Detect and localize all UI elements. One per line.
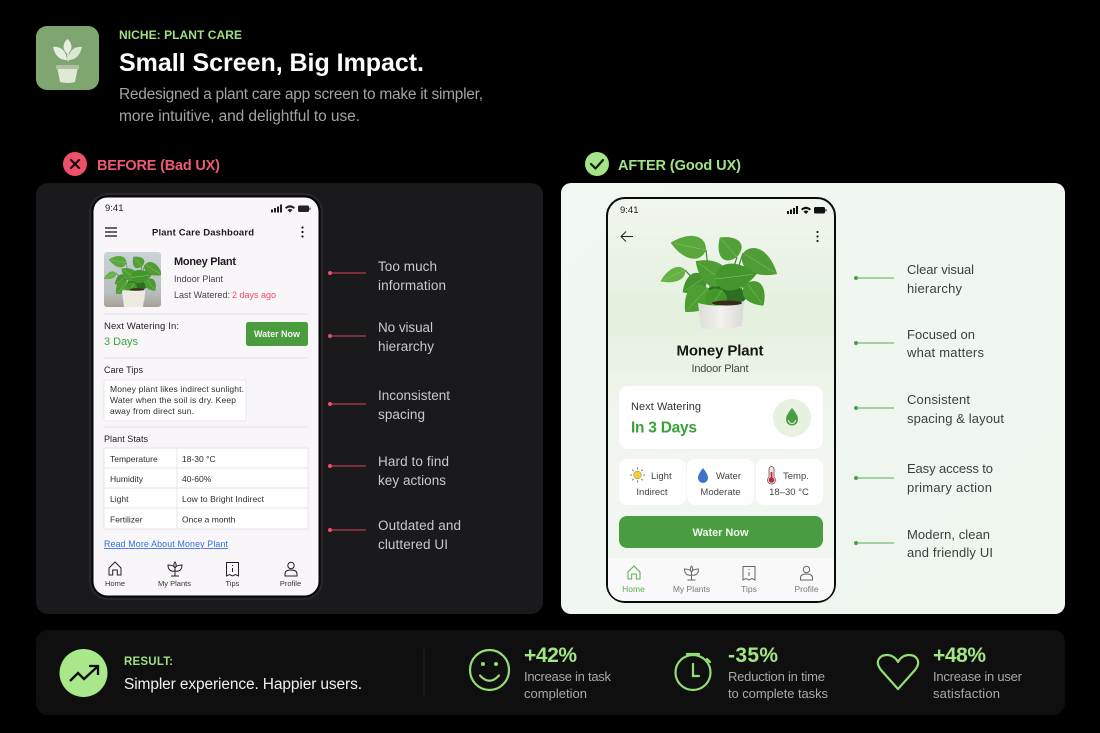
next watering: [104, 321, 179, 348]
stat: task completion: +42%: [524, 644, 577, 667]
stat: task completion: [470, 644, 612, 701]
before heading: [63, 152, 220, 176]
stat card: water: Moderate: [700, 487, 741, 498]
panel: result: [36, 630, 1065, 715]
header: subtitle: Redesigned a plant care app screen to make it simpler,: [119, 86, 483, 103]
after callouts: primary action: [907, 480, 992, 495]
after callouts: Consistent: [907, 392, 970, 407]
phone: good UX screen: [607, 198, 835, 602]
before callouts: Too much: [378, 259, 437, 274]
plant info: Indoor Plant: [174, 274, 223, 284]
stat: satisfaction: Increase in user: [933, 669, 1023, 684]
plant name: [676, 342, 764, 375]
plant info: Last Watered:: [174, 290, 230, 300]
bottom navigation: Tips: [741, 584, 757, 594]
plant stats table: Temperature: [110, 454, 158, 464]
stat card: light: [619, 459, 686, 505]
header: app icon: [36, 26, 99, 90]
before callouts: Inconsistent: [378, 388, 450, 403]
result text: Simpler experience. Happier users.: [124, 676, 362, 693]
before callouts: [328, 259, 461, 552]
stat: satisfaction: [878, 644, 1023, 701]
primary button: Water Now: [692, 527, 749, 539]
plant image: [658, 230, 783, 329]
before callouts: Outdated and: [378, 518, 461, 533]
plant stats table: Light: [110, 494, 129, 504]
water now button: [246, 322, 308, 346]
phone: bad UX screen: [90, 194, 322, 599]
after callouts: what matters: [906, 345, 984, 360]
bottom navigation: [608, 558, 834, 601]
stat card: temperature: Temp.: [783, 471, 809, 482]
plant stats table: Humidity: [110, 474, 144, 484]
stat: satisfaction: +48%: [933, 644, 986, 667]
plant stats table: Once a month: [182, 514, 236, 524]
stat: time on task: Reduction in time: [728, 669, 825, 684]
app bar: [105, 226, 304, 238]
next watering: 3 Days: [104, 336, 138, 348]
after callouts: Clear visual: [907, 262, 974, 277]
after callouts: Easy access to: [907, 461, 993, 476]
plant name: Indoor Plant: [692, 363, 748, 375]
plant name: Money Plant: [676, 342, 764, 360]
result text: [124, 656, 362, 693]
next watering card: [619, 386, 823, 449]
stat: satisfaction: satisfaction: [933, 686, 1000, 701]
icon: trending up: [60, 649, 108, 697]
next watering: Next Watering In:: [104, 321, 179, 332]
panel: before: [36, 183, 543, 614]
next watering card: Next Watering: [631, 401, 701, 413]
plant info: [174, 256, 276, 300]
after callouts: Modern, clean: [907, 527, 990, 542]
after callouts: [854, 262, 1004, 560]
before heading: BEFORE (Bad UX): [97, 158, 220, 174]
panel: after: [561, 183, 1065, 614]
bottom navigation: Profile: [794, 584, 819, 594]
header: niche label: NICHE: PLANT CARE: [119, 28, 242, 42]
stat: task completion: Increase in task: [524, 669, 612, 684]
plant stats table: Low to Bright Indirect: [182, 494, 265, 504]
stat: time on task: to complete tasks: [728, 686, 828, 701]
after heading: [585, 152, 741, 176]
bottom navigation: My Plants: [158, 579, 191, 588]
plant photo: [102, 252, 165, 307]
care tips: away from direct sun.: [110, 406, 194, 416]
status bar: 9:41: [620, 205, 638, 216]
plant stats table: Fertilizer: [110, 514, 143, 524]
stat card: light: Indirect: [636, 487, 668, 498]
header: subtitle: more intuitive, and delightful to use.: [119, 108, 360, 125]
plant stats table: 18-30 °C: [182, 454, 216, 464]
before callouts: hierarchy: [378, 339, 434, 354]
stat card: temperature: 18–30 °C: [769, 487, 809, 498]
plant stats table: Plant Stats: [104, 434, 148, 444]
bottom navigation: Home: [105, 579, 125, 588]
before callouts: Hard to find: [378, 454, 449, 469]
water now button: Water Now: [254, 329, 301, 339]
bottom navigation: My Plants: [673, 584, 710, 594]
bottom navigation: Profile: [280, 579, 301, 588]
before callouts: information: [378, 278, 446, 293]
after callouts: hierarchy: [907, 281, 962, 296]
care tips: Care Tips: [104, 365, 144, 375]
plant info: 2 days ago: [232, 290, 276, 300]
stat card: water: Water: [716, 471, 741, 482]
before callouts: No visual: [378, 320, 433, 335]
header: title: Small Screen, Big Impact.: [119, 49, 424, 77]
back arrow and menu: [621, 231, 819, 242]
header: subtitle: [119, 86, 483, 125]
stat card: temperature: [756, 459, 823, 505]
read more link: Read More About Money Plant: [104, 539, 229, 549]
care tips: [104, 365, 246, 421]
stat: time on task: -35%: [728, 644, 778, 667]
bottom navigation: Home: [622, 584, 645, 594]
bottom navigation: Tips: [226, 579, 240, 588]
care tips: Water when the soil is dry. Keep: [110, 395, 236, 405]
status bar: [620, 205, 826, 216]
after callouts: Focused on: [907, 327, 975, 342]
result text: RESULT:: [124, 656, 173, 668]
bottom navigation: [105, 562, 301, 588]
primary button: [619, 516, 823, 548]
care tips: Money plant likes indirect sunlight.: [110, 384, 244, 394]
stat card: water: [687, 459, 754, 505]
status bar: 9:41: [105, 203, 124, 214]
plant stats table: 40-60%: [182, 474, 212, 484]
next watering card: In 3 Days: [631, 420, 697, 436]
status bar: [105, 203, 310, 214]
before callouts: cluttered UI: [378, 537, 448, 552]
stat card: light: Light: [651, 471, 672, 482]
plant stats table: [104, 434, 308, 529]
app bar: Plant Care Dashboard: [152, 228, 254, 238]
before callouts: key actions: [378, 473, 446, 488]
after callouts: and friendly UI: [907, 545, 993, 560]
after heading: AFTER (Good UX): [618, 158, 741, 174]
stat: task completion: completion: [524, 686, 587, 701]
stat: time on task: [676, 644, 828, 701]
before callouts: spacing: [378, 407, 425, 422]
after callouts: spacing & layout: [907, 411, 1004, 426]
plant info: Money Plant: [174, 256, 236, 268]
